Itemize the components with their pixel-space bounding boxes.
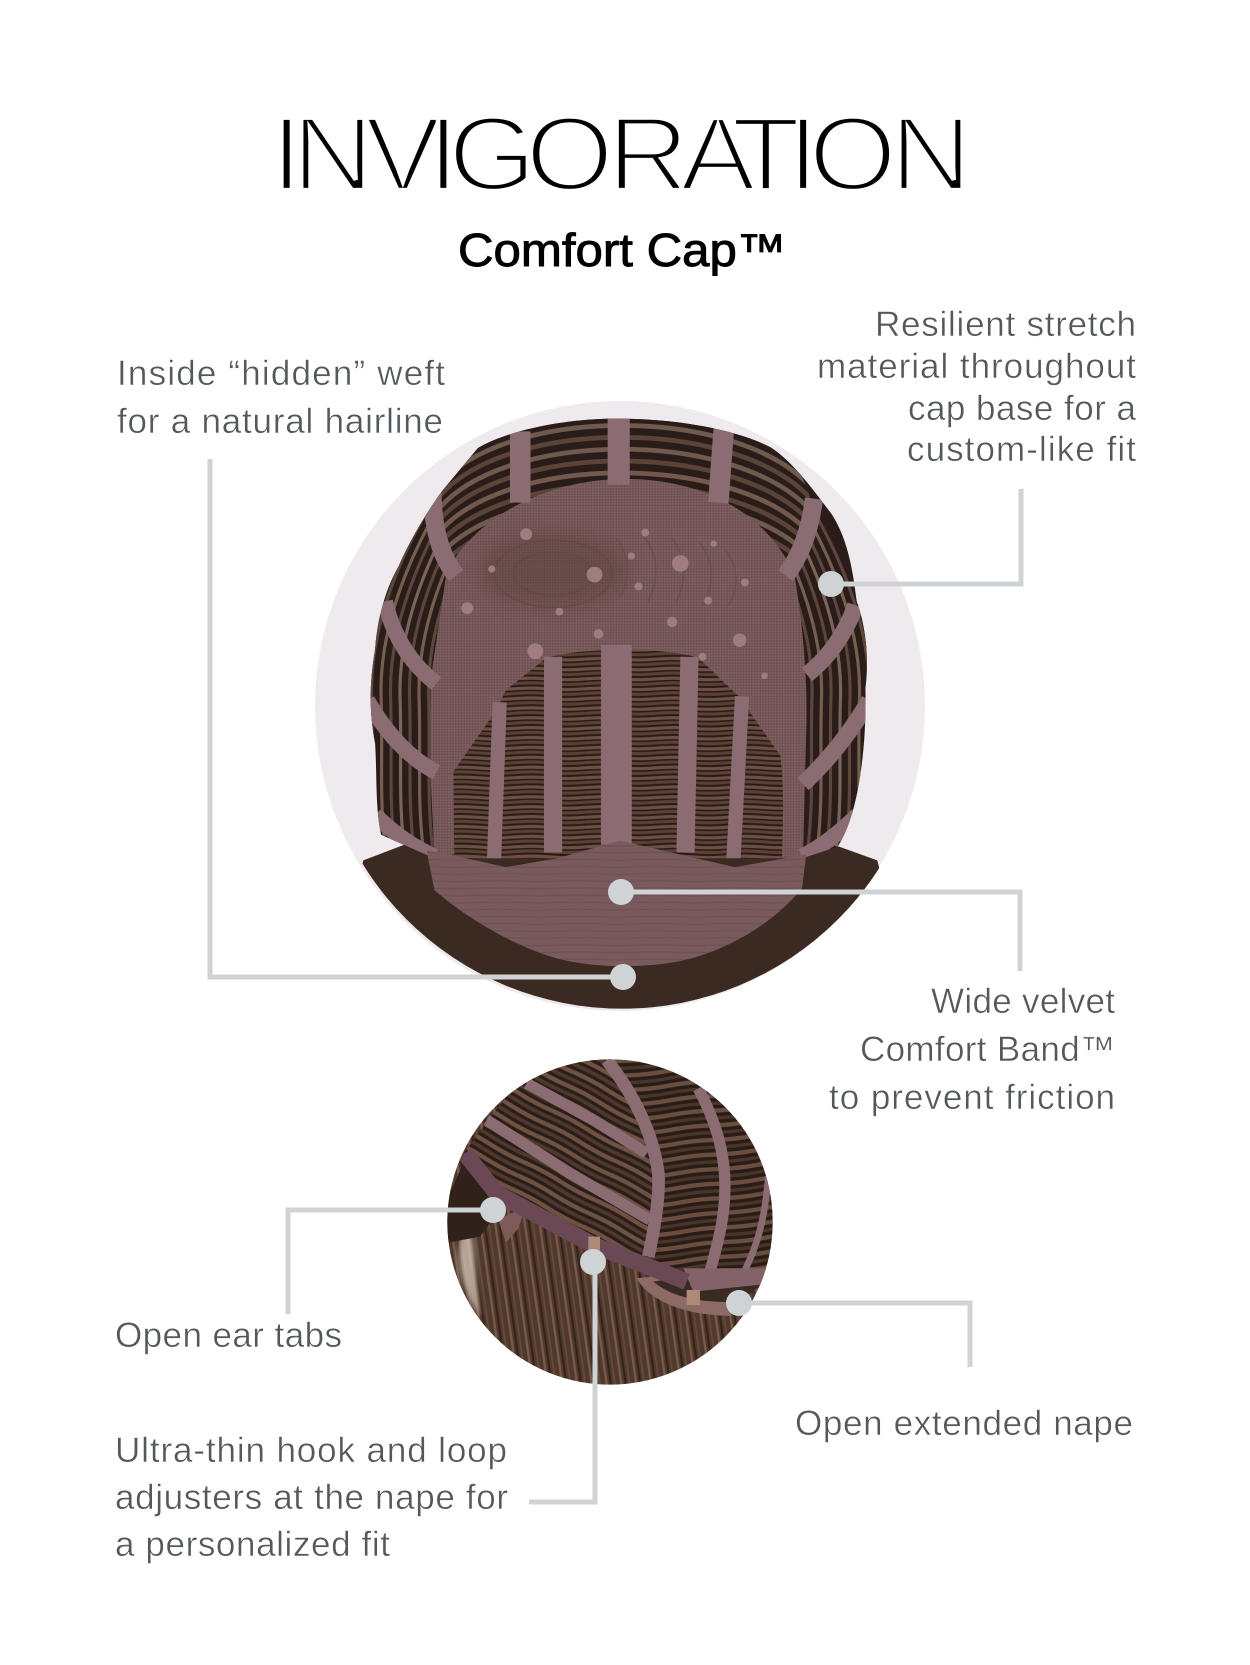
label: stretch material: custom-like fit [907, 430, 1136, 469]
leader: comfort band [621, 892, 1020, 971]
label: ear tabs: Open ear tabs [115, 1316, 342, 1355]
label: comfort band: Comfort Band™ [860, 1030, 1115, 1069]
cap bands [487, 1060, 768, 1272]
label: hook and loop: adjusters at the nape for [115, 1478, 508, 1517]
label: hidden weft [117, 354, 445, 441]
label: open nape: Open extended nape [795, 1404, 1133, 1443]
photo: back of cap, small circle [440, 1053, 783, 1393]
label: stretch material [817, 305, 1137, 469]
label: comfort band: to prevent friction [829, 1078, 1115, 1117]
weft stripes: right panel [609, 1059, 773, 1284]
nape band [683, 1268, 773, 1292]
dark hair shadow at left [447, 1164, 490, 1242]
weft stripes: left side [370, 458, 469, 846]
leader: stretch material [831, 489, 1021, 584]
lace crown [430, 479, 807, 858]
weft silhouette [370, 418, 867, 858]
hair below the cap [362, 845, 880, 1009]
label: stretch material: cap base for a [908, 389, 1137, 428]
title: INVIGORATION: INVIGORATION [271, 96, 972, 213]
lace spots [461, 528, 768, 679]
label: stretch material: Resilient stretch [875, 305, 1136, 344]
photo: inside of cap, large circle [315, 401, 925, 1013]
label: hook and loop: a personalized fit [115, 1525, 390, 1564]
leader: hidden weft [210, 459, 623, 977]
nape opening [653, 1277, 763, 1302]
hair below the cap [440, 1053, 783, 1393]
nape flap [637, 1276, 750, 1316]
lace darker centre [478, 530, 628, 609]
subtitle: Comfort Cap: Comfort Cap™ [458, 224, 786, 276]
lower weft window [453, 650, 783, 868]
label: comfort band [829, 982, 1115, 1117]
leader: hook and loop [529, 1262, 595, 1502]
label: hidden weft: Inside “hidden” weft [117, 354, 445, 393]
label: stretch material: material throughout [817, 347, 1136, 386]
ear tab [498, 1212, 522, 1242]
weft stripes: crown [436, 418, 810, 558]
hair highlight [459, 1233, 480, 1317]
label: hook and loop [115, 1431, 508, 1564]
marker dots [480, 571, 844, 1316]
neck band [465, 1153, 687, 1282]
leader: open nape [739, 1303, 970, 1367]
comfort band [427, 841, 806, 966]
label: comfort band: Wide velvet [931, 982, 1115, 1021]
weft stripes: right side [796, 519, 867, 847]
weft stripes: left panel [463, 1053, 660, 1260]
adjuster tabs [588, 1237, 700, 1305]
label: hook and loop: Ultra-thin hook and loop [115, 1431, 507, 1470]
leader: ear tabs [288, 1210, 493, 1314]
lace weft ghost arcs [494, 536, 736, 607]
cap bands [367, 416, 869, 868]
label: hidden weft: for a natural hairline [117, 402, 443, 441]
